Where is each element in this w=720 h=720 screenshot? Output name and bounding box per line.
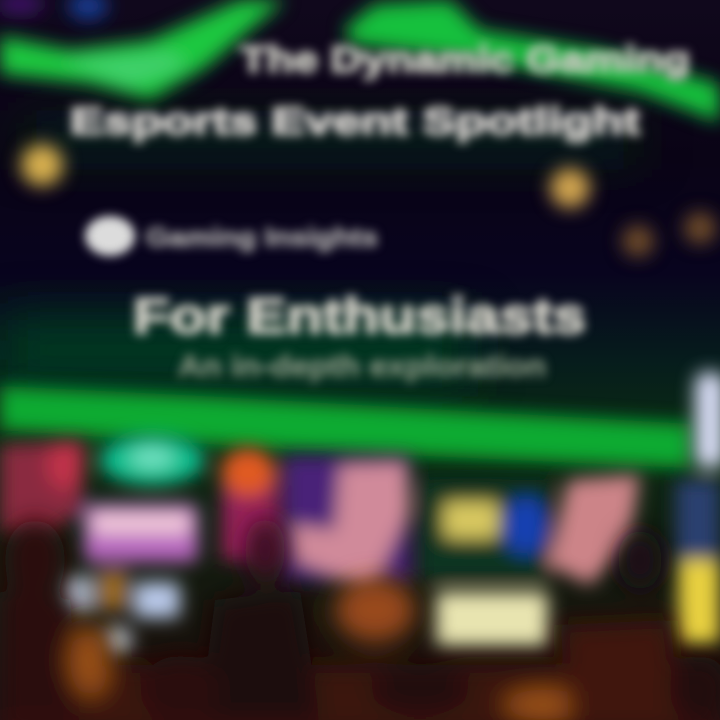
- audience silhouettes: [0, 518, 720, 720]
- top green banner: [0, 0, 720, 122]
- light right 2: [684, 212, 716, 244]
- top corner colour spots: [0, 0, 108, 20]
- brand row: [85, 216, 378, 256]
- orange glow left: [70, 624, 110, 696]
- screen: blue tile: [502, 498, 550, 554]
- screen: teal lamp: [100, 435, 204, 485]
- screen: orange and magenta: [222, 470, 278, 560]
- orange glow centre: [335, 578, 415, 642]
- stage screens: [0, 372, 720, 655]
- screen: yellow tile: [444, 502, 498, 538]
- light right 1: [622, 225, 654, 257]
- light centre right: [550, 168, 590, 208]
- gold lights: [21, 144, 716, 257]
- screen: white lower tile: [436, 592, 548, 646]
- title line 2: Esports Event Spotlight: [70, 101, 640, 143]
- screen: right stack: [676, 480, 720, 570]
- figure right: [560, 620, 680, 720]
- title text: [70, 39, 690, 143]
- screen: small tiles: [62, 576, 94, 612]
- lower green band: [0, 386, 690, 468]
- title line 1: The Dynamic Gaming: [240, 39, 690, 80]
- brand text: Gaming Insights: [146, 222, 378, 252]
- screen: dark green: [420, 480, 550, 580]
- screen: pink figure centre: [290, 462, 410, 590]
- screen: red left: [0, 440, 85, 540]
- light left: [21, 144, 63, 186]
- figure centre left: [245, 518, 285, 582]
- figure left: [5, 520, 65, 600]
- screen: pink banner: [84, 504, 198, 562]
- screen: pink figure right: [548, 474, 640, 585]
- icon: logo: [85, 216, 135, 256]
- screen: violet panel: [284, 456, 410, 581]
- main subheading: For Enthusiasts: [133, 288, 586, 344]
- ambient green glow: [0, 125, 640, 380]
- sub caption: An in-depth exploration: [178, 350, 546, 383]
